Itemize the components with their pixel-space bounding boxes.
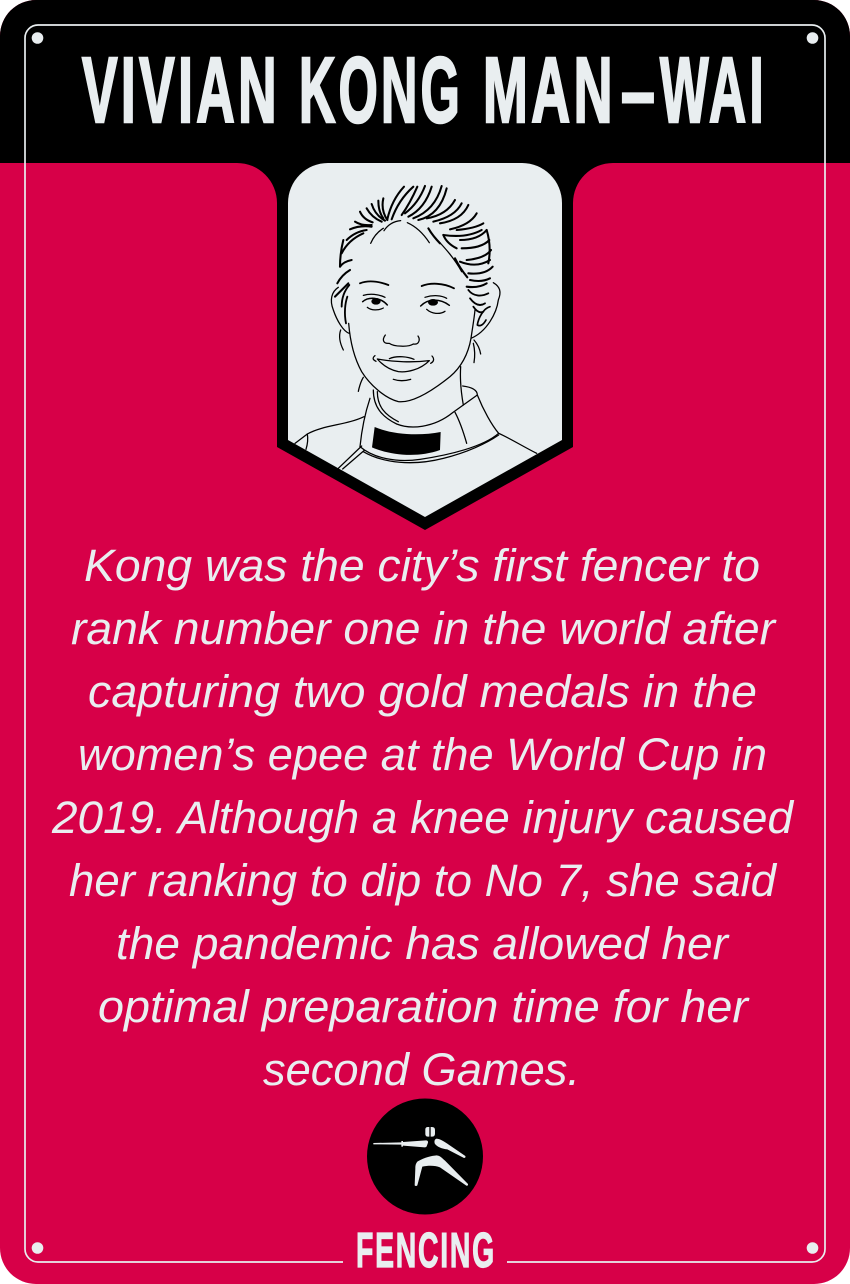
head outline bbox=[349, 310, 475, 402]
description text: second Games. bbox=[263, 1044, 580, 1095]
badge fill bbox=[288, 163, 562, 517]
description text: women’s epee at the World Cup in bbox=[78, 729, 767, 780]
description text: her ranking to dip to No 7, she said bbox=[69, 855, 778, 906]
icon: fencer bbox=[367, 1098, 483, 1214]
hair bbox=[335, 186, 493, 297]
torso and rear arm bbox=[434, 1139, 465, 1158]
description text: the pandemic has allowed her bbox=[116, 918, 730, 969]
jaw and neck lines bbox=[358, 377, 363, 391]
left ear bbox=[331, 287, 349, 333]
shoulders bbox=[295, 417, 364, 443]
description text bbox=[51, 540, 795, 1095]
portrait badge bbox=[277, 163, 573, 530]
collar patch bbox=[372, 427, 441, 455]
title: MAN bbox=[483, 38, 616, 142]
title bbox=[82, 38, 767, 142]
title: VIVIAN bbox=[82, 38, 280, 142]
hairline bbox=[384, 221, 401, 231]
mouth bbox=[377, 359, 429, 372]
eyebrows bbox=[360, 282, 388, 285]
description text: rank number one in the world after bbox=[71, 603, 777, 654]
description text: 2019. Although a knee injury caused bbox=[51, 792, 795, 843]
description text: Kong was the city’s first fencer to bbox=[84, 540, 760, 591]
collar bbox=[373, 386, 477, 427]
front arm and sword bbox=[373, 1140, 428, 1147]
nose bbox=[383, 335, 419, 346]
badge outline bbox=[277, 200, 573, 530]
legs bbox=[415, 1155, 468, 1186]
head bbox=[425, 1127, 435, 1137]
title: KONG bbox=[299, 38, 463, 142]
title: WAI bbox=[660, 38, 767, 142]
portrait line drawing bbox=[295, 186, 537, 469]
description text: capturing two gold medals in the bbox=[88, 666, 757, 717]
eyes bbox=[363, 298, 387, 305]
right ear bbox=[471, 283, 500, 338]
description text: optimal preparation time for her bbox=[98, 981, 750, 1032]
sport label: FENCING bbox=[356, 1224, 496, 1278]
title: - bbox=[617, 38, 659, 142]
